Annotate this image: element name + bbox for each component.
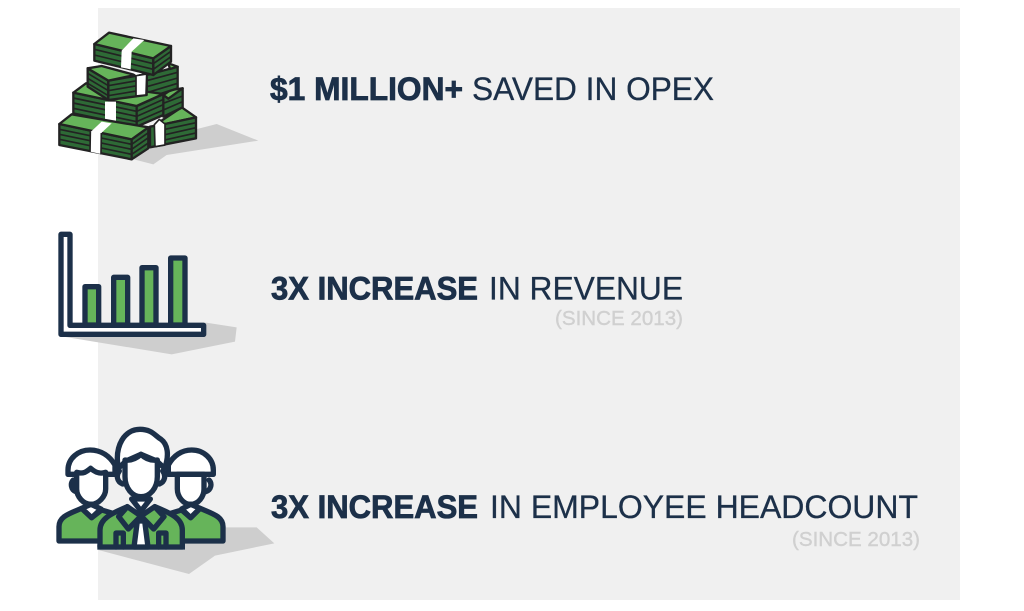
headline: revenue: IN REVENUE [489, 270, 683, 306]
note: since 2013 headcount: (SINCE 2013) [792, 528, 920, 551]
headline: revenue: 3X INCREASE [271, 270, 478, 306]
headline: headcount [271, 489, 918, 525]
headline: saved in opex: SAVED IN OPEX [472, 71, 714, 107]
headline: saved in opex: $1 MILLION+ [270, 71, 463, 107]
headline: saved in opex [270, 71, 714, 107]
note: since 2013 revenue: (SINCE 2013) [555, 307, 683, 330]
headline: revenue [271, 270, 683, 306]
icon: bar chart [61, 234, 237, 354]
headline: headcount: 3X INCREASE [271, 489, 478, 525]
headline: headcount: IN EMPLOYEE HEADCOUNT [490, 489, 918, 525]
icon: money stacks [59, 33, 258, 164]
icon: employee group [59, 429, 274, 574]
